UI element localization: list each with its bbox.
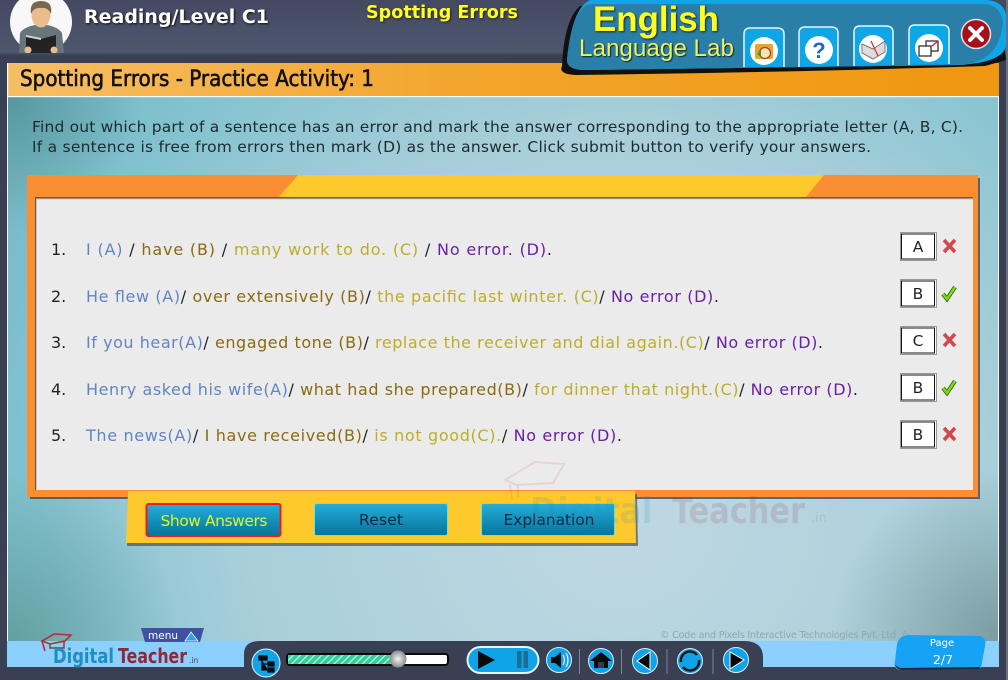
brand subtitle: Language Lab <box>579 35 734 62</box>
question 5: The news(A)/ I have received(B)/ is not good(C)./ No error (D). <box>85 426 622 445</box>
button: show answers: Show Answers <box>160 512 268 530</box>
progress slider <box>287 650 448 668</box>
icon: volume <box>546 648 572 672</box>
toolbar icon: help: ? <box>812 38 826 63</box>
question 1: I (A) / have (B) / many work to do. (C) / No error. (D). <box>86 240 552 259</box>
brand title: English <box>593 0 719 39</box>
logo: Digital Teacher: .in <box>189 656 198 665</box>
answer 5: B, wrong: B <box>913 426 923 444</box>
watermark logo: Teacher <box>672 491 805 532</box>
answer 3: C, wrong: C <box>913 332 923 350</box>
answer 5: B, wrong <box>900 420 955 448</box>
answer 2: B, correct: B <box>913 285 923 303</box>
title bar <box>7 63 999 97</box>
icon: replay <box>678 648 702 674</box>
icon: home <box>588 648 614 674</box>
instructions <box>32 118 963 156</box>
brand panel: English Language Lab <box>561 0 1006 75</box>
panel: exercise <box>27 175 980 499</box>
button: explanation <box>482 504 614 536</box>
button tray <box>126 491 638 546</box>
question 2: He flew (A)/ over extensively (B)/ the pacific last winter. (C)/ No error (D). <box>86 287 719 306</box>
watermark logo: .in <box>811 511 827 526</box>
question 2: 2. <box>51 287 66 306</box>
watermark logo <box>505 462 827 532</box>
instructions: If a sentence is free from errors then mark (D) as the answer. Click submit button to verify your answers. <box>32 138 871 156</box>
menu tab <box>141 628 204 642</box>
toolbar icon: window <box>909 25 949 65</box>
logo: Digital Teacher <box>42 634 198 668</box>
heading: level: Reading/Level C1 <box>84 7 269 28</box>
page label: Page <box>930 638 954 649</box>
question 1: 1. <box>51 240 66 259</box>
icon: next <box>724 648 748 672</box>
question 5: 5. <box>51 426 66 445</box>
footer band <box>7 641 999 667</box>
question 3: If you hear(A)/ engaged tone (B)/ replace the receiver and dial again.(C)/ No error (D). <box>86 333 823 352</box>
button: reset <box>314 504 448 536</box>
button: reset: Reset <box>359 511 403 529</box>
page indicator <box>895 635 985 670</box>
icon: topic tree <box>252 649 280 677</box>
play and pause control <box>468 647 538 673</box>
toolbar icon: folder clock <box>744 28 784 67</box>
question 4: Henry asked his wife(A)/ what had she prepared(B)/ for dinner that night.(C)/ No error (D). <box>86 380 858 399</box>
button: explanation: Explanation <box>504 511 594 529</box>
watermark logo: Digital <box>530 491 653 532</box>
menu tab: menu <box>148 630 178 642</box>
toolbar icon: help <box>799 27 838 67</box>
question 4: 4. <box>51 380 66 399</box>
heading: topic: Spotting Errors <box>366 3 518 23</box>
answer 1: A, wrong <box>900 232 955 260</box>
title bar: Spotting Errors - Practice Activity: 1 <box>20 67 374 92</box>
answer 2: B, correct <box>900 280 955 308</box>
close button <box>962 20 990 48</box>
answer 4: B, correct: B <box>913 379 923 397</box>
question 3: 3. <box>51 333 66 352</box>
answer 4: B, correct <box>900 374 955 402</box>
button: show answers <box>146 504 280 536</box>
instructions: Find out which part of a sentence has an error and mark the answer corresponding to the appropriate letter (A, B, C). <box>32 118 963 136</box>
icon: previous <box>632 648 658 674</box>
control separators <box>580 649 713 674</box>
copyright note: © Code and Pixels Interactive Technologies Pvt. Ltd. A <box>660 630 908 641</box>
answer 3: C, wrong <box>900 326 955 354</box>
content background <box>7 97 999 642</box>
page number: 2/7 <box>933 652 953 667</box>
answer 1: A, wrong: A <box>913 238 924 256</box>
logo: Digital Teacher: Teacher <box>118 644 187 668</box>
header band <box>0 0 1006 68</box>
control bar <box>244 641 763 680</box>
toolbar icon: book <box>854 26 893 66</box>
logo: Digital Teacher: Digital <box>53 644 114 668</box>
avatar: student reading <box>10 0 72 54</box>
